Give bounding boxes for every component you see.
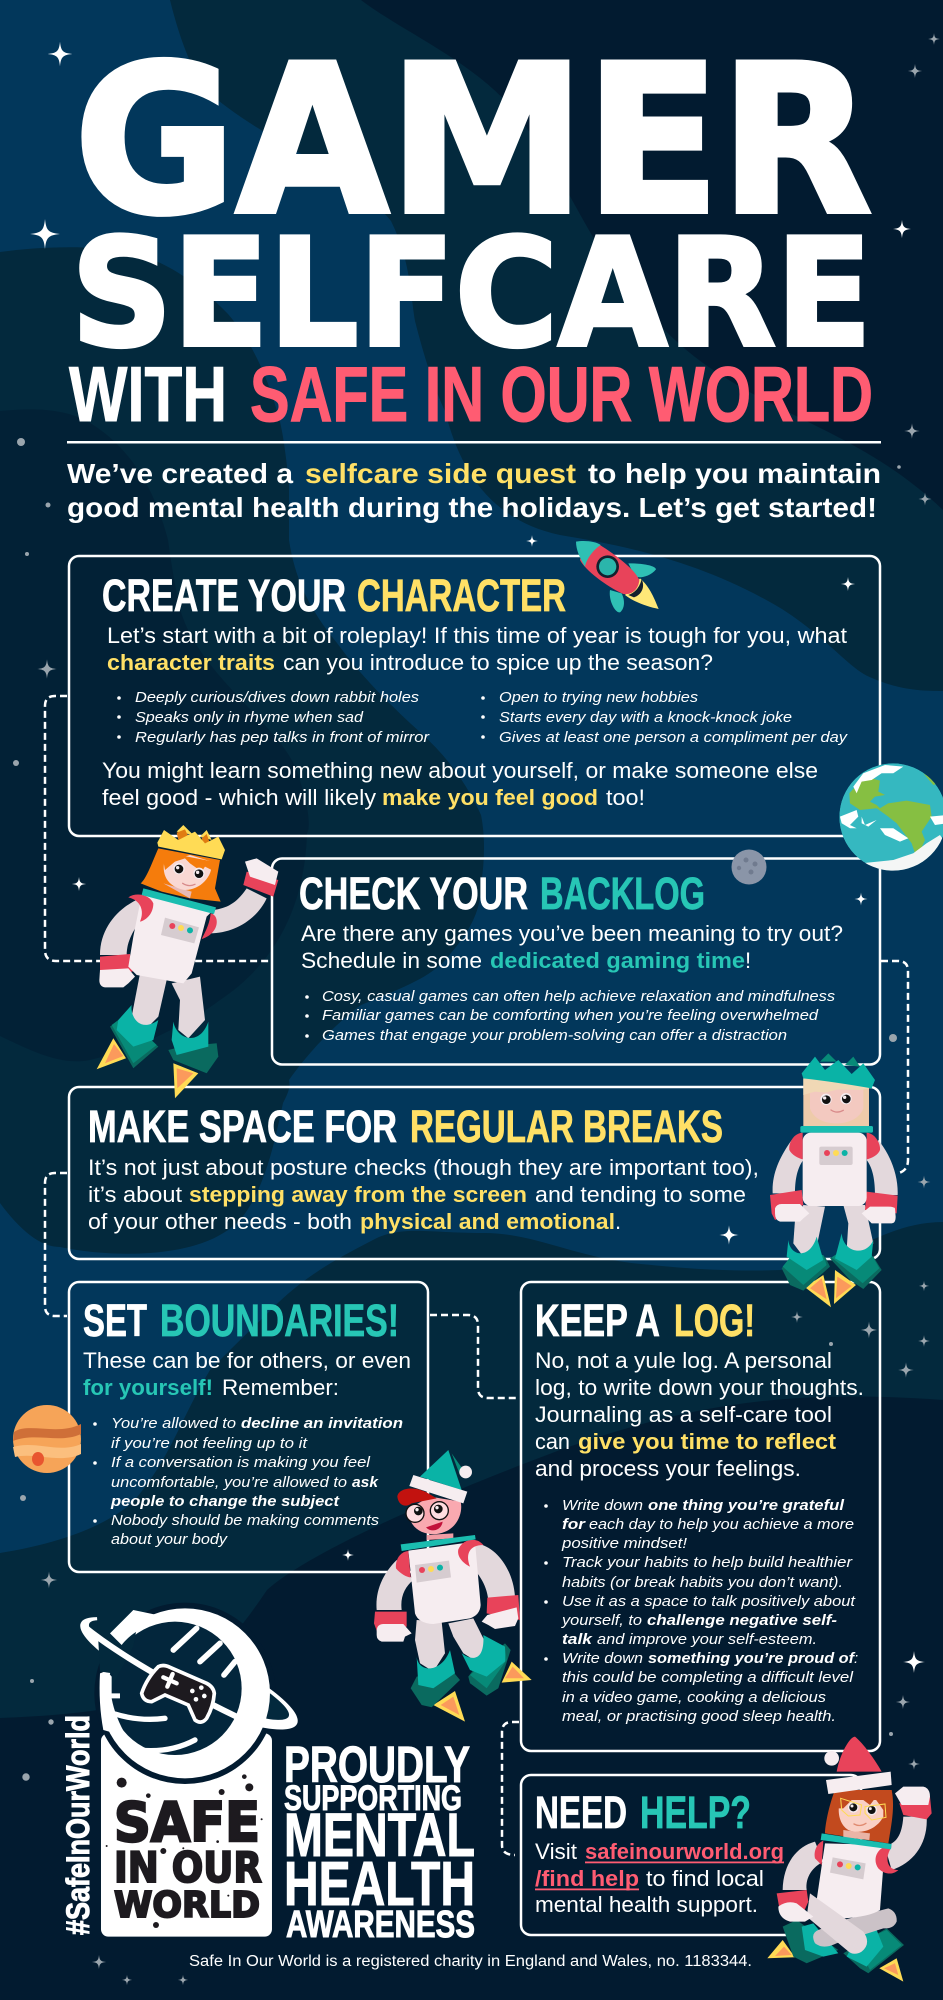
- icon: earth: [839, 763, 943, 873]
- paragraph: Remember:: [222, 1375, 339, 1400]
- paragraph with link: mental health support.: [535, 1892, 758, 1917]
- bullet list: [305, 988, 836, 1044]
- character: green-hat astronaut: [770, 1053, 898, 1307]
- bullet list: Write down: [562, 1497, 643, 1514]
- slogan: proudly supporting mental health awareness: SUPPORTING: [284, 1779, 462, 1818]
- closing paragraph: too!: [606, 785, 645, 810]
- paragraph: These can be for others, or even: [83, 1348, 411, 1373]
- paragraph: for yourself!: [83, 1375, 213, 1400]
- bullet list: traits: Starts every day with a knock-knock joke: [499, 709, 792, 726]
- paragraph: can: [535, 1429, 570, 1454]
- bullet list: traits: Regularly has pep talks in front of mirror: [135, 729, 430, 746]
- bullet list: meal, or practising good sleep health.: [562, 1708, 836, 1725]
- bullet list: Nobody should be making comments: [111, 1512, 380, 1529]
- paragraph: !: [745, 948, 751, 973]
- title line: SELFCARE: SELFCARE: [71, 208, 872, 381]
- paragraph: log, to write down your thoughts.: [535, 1375, 864, 1400]
- panel: need help: [521, 1775, 861, 1935]
- slogan: proudly supporting mental health awareness: AWARENESS: [286, 1904, 475, 1946]
- bullet list: and improve your self-esteem.: [597, 1631, 817, 1648]
- bullet list: Track your habits to help build healthier: [562, 1554, 853, 1571]
- panel: set boundaries: [69, 1282, 428, 1572]
- intro paragraph: can you introduce to spice up the season?: [283, 650, 713, 675]
- bullet list: Games that engage your problem-solving can offer a distraction: [322, 1027, 787, 1044]
- logo wordmark: [114, 1791, 262, 1926]
- slogan: proudly supporting mental health awareness: [284, 1736, 475, 1946]
- subtitle: with Safe In Our World: WITH: [69, 350, 227, 438]
- heading: CHECK YOUR: [299, 868, 528, 919]
- paragraph: and process your feelings.: [535, 1456, 801, 1481]
- bullet list: traits: Gives at least one person a compliment per day: [499, 729, 849, 746]
- bullet list: You’re allowed to: [111, 1415, 236, 1432]
- bullet list: each day to help you achieve a more: [589, 1516, 854, 1533]
- paragraph with link: to find local: [646, 1866, 764, 1891]
- panel: regular breaks: [69, 1087, 880, 1259]
- paragraph: Journaling as a self-care tool: [535, 1402, 832, 1427]
- bullet list: Familiar games can be comforting when you’re feeling overwhelmed: [322, 1007, 819, 1024]
- paragraph with link: safeinourworld.org: [585, 1839, 784, 1864]
- bullet list: talk: [562, 1631, 593, 1648]
- logo wordmark: WORLD: [114, 1885, 260, 1926]
- character: elf-hat astronaut with glasses: [374, 1450, 532, 1722]
- heading: NEED: [535, 1787, 627, 1838]
- bullet list: this could be completing a difficult level: [562, 1669, 854, 1686]
- intro paragraph: character traits: [107, 650, 275, 675]
- bullet list: Write down: [562, 1650, 643, 1667]
- bullet list: traits: Deeply curious/dives down rabbit holes: [135, 689, 420, 706]
- logo wordmark: IN OUR: [114, 1843, 262, 1892]
- bullet list: uncomfortable, you’re allowed to: [111, 1474, 347, 1491]
- paragraph: [301, 921, 843, 973]
- heading: [88, 1101, 723, 1152]
- bullet list: people to change the subject: [110, 1493, 340, 1510]
- bullet list: positive mindset!: [561, 1535, 688, 1552]
- bullet list: one thing you’re grateful: [648, 1497, 845, 1514]
- heading: CREATE YOUR: [102, 570, 346, 621]
- paragraph: .: [615, 1209, 621, 1234]
- bullet list: in a video game, cooking a delicious: [562, 1689, 827, 1706]
- bullet list: Cosy, casual games can often help achieve relaxation and mindfulness: [322, 988, 836, 1005]
- bullet list: if you’re not feeling up to it: [111, 1435, 308, 1452]
- paragraph: it’s about: [88, 1182, 182, 1207]
- heading: SET: [83, 1295, 147, 1346]
- slogan: proudly supporting mental health awareness: PROUDLY: [284, 1736, 470, 1793]
- bullet list: [93, 1415, 403, 1548]
- icon: moon: [732, 850, 766, 884]
- footer note: Safe In Our World is a registered charity in England and Wales, no. 1183344.: [189, 1953, 752, 1970]
- logo: Safe In Our World: [69, 1598, 309, 1937]
- paragraph with link: /find help: [535, 1866, 639, 1891]
- closing paragraph: [102, 758, 818, 810]
- title line: GAMER: GAMER: [74, 22, 872, 260]
- character: santa-hat astronaut cross-legged: [767, 1737, 932, 1982]
- heading: MAKE SPACE FOR: [88, 1101, 397, 1152]
- bullet list: traits: Open to trying new hobbies: [499, 689, 699, 706]
- intro paragraph: [107, 623, 847, 675]
- bullet list: :: [854, 1650, 858, 1667]
- heading: HELP?: [640, 1787, 751, 1838]
- bullet list: ask: [352, 1474, 379, 1491]
- dashed connector: box 4 to box 5: [430, 1315, 519, 1398]
- closing paragraph: make you feel good: [382, 785, 598, 810]
- bullet list: for: [562, 1516, 586, 1533]
- bullet list: about your body: [111, 1531, 229, 1548]
- intro paragraph: Let’s start with a bit of roleplay! If this time of year is tough for you, what: [107, 623, 847, 648]
- heading: BOUNDARIES!: [160, 1295, 399, 1346]
- icon: game controller: [142, 1665, 214, 1722]
- hashtag: #SafeInOurWorld: [60, 1715, 96, 1935]
- icon: rocket: [576, 541, 659, 612]
- bullet list: [544, 1497, 858, 1725]
- panel: create your character: [69, 556, 880, 836]
- heading: REGULAR BREAKS: [410, 1101, 723, 1152]
- panel: check your backlog: [272, 858, 880, 1064]
- icon: jupiter: [13, 1405, 81, 1473]
- paragraph: of your other needs - both: [88, 1209, 352, 1234]
- paragraph with link: Visit: [535, 1839, 577, 1864]
- paragraph: It’s not just about posture checks (though they are important too),: [88, 1155, 759, 1180]
- heading: BACKLOG: [540, 868, 705, 919]
- dashed connector: box 2 to box 3: [881, 961, 908, 1173]
- intro text: to help you maintain: [588, 458, 881, 489]
- heading: [535, 1787, 751, 1838]
- logo wordmark: SAFE: [114, 1791, 260, 1854]
- paragraph: give you time to reflect: [578, 1429, 837, 1454]
- closing paragraph: You might learn something new about yourself, or make someone else: [102, 758, 818, 783]
- bullet list: Use it as a space to talk positively about: [562, 1593, 856, 1610]
- paragraph: Schedule in some: [301, 948, 482, 973]
- heading: KEEP A: [535, 1295, 660, 1346]
- heading: [102, 570, 566, 621]
- character: crowned astronaut: [97, 825, 278, 1098]
- dashed connector: box 1 to box 2: [45, 696, 270, 961]
- paragraph: [535, 1348, 864, 1481]
- paragraph: and tending to some: [535, 1182, 746, 1207]
- closing paragraph: feel good - which will likely: [102, 785, 376, 810]
- panel: keep a log: [521, 1282, 880, 1751]
- paragraph: [88, 1155, 759, 1234]
- intro text: [67, 458, 881, 523]
- heading: LOG!: [674, 1295, 755, 1346]
- paragraph with link: [535, 1839, 784, 1917]
- paragraph: physical and emotional: [360, 1209, 615, 1234]
- bullet list: habits (or break habits you don’t want).: [562, 1574, 843, 1591]
- title: [69, 22, 873, 438]
- intro text: selfcare side quest: [305, 458, 576, 489]
- paragraph: [83, 1348, 411, 1400]
- paragraph: No, not a yule log. A personal: [535, 1348, 832, 1373]
- dashed connector: box 5 to box 6: [502, 1722, 519, 1855]
- slogan: proudly supporting mental health awareness: HEALTH: [284, 1850, 475, 1919]
- intro text: good mental health during the holidays. Let’s get started!: [67, 492, 877, 523]
- intro text: We’ve created a: [67, 458, 293, 489]
- paragraph: dedicated gaming time: [490, 948, 745, 973]
- bullet list: decline an invitation: [241, 1415, 403, 1432]
- heading: CHARACTER: [357, 570, 566, 621]
- bullet list: traits: [117, 689, 849, 746]
- heading: [83, 1295, 399, 1346]
- paragraph: stepping away from the screen: [189, 1182, 527, 1207]
- bullet list: traits: Speaks only in rhyme when sad: [135, 709, 364, 726]
- paragraph: Are there any games you’ve been meaning to try out?: [301, 921, 843, 946]
- bullet list: challenge negative self-: [647, 1612, 837, 1629]
- slogan: proudly supporting mental health awareness: MENTAL: [284, 1801, 475, 1869]
- bullet list: If a conversation is making you feel: [111, 1454, 371, 1471]
- bullet list: yourself, to: [561, 1612, 642, 1629]
- logo planet badge: [69, 1598, 309, 1937]
- bullet list: something you’re proud of: [648, 1650, 856, 1667]
- dashed connector: box 3 to box 4: [45, 1173, 67, 1316]
